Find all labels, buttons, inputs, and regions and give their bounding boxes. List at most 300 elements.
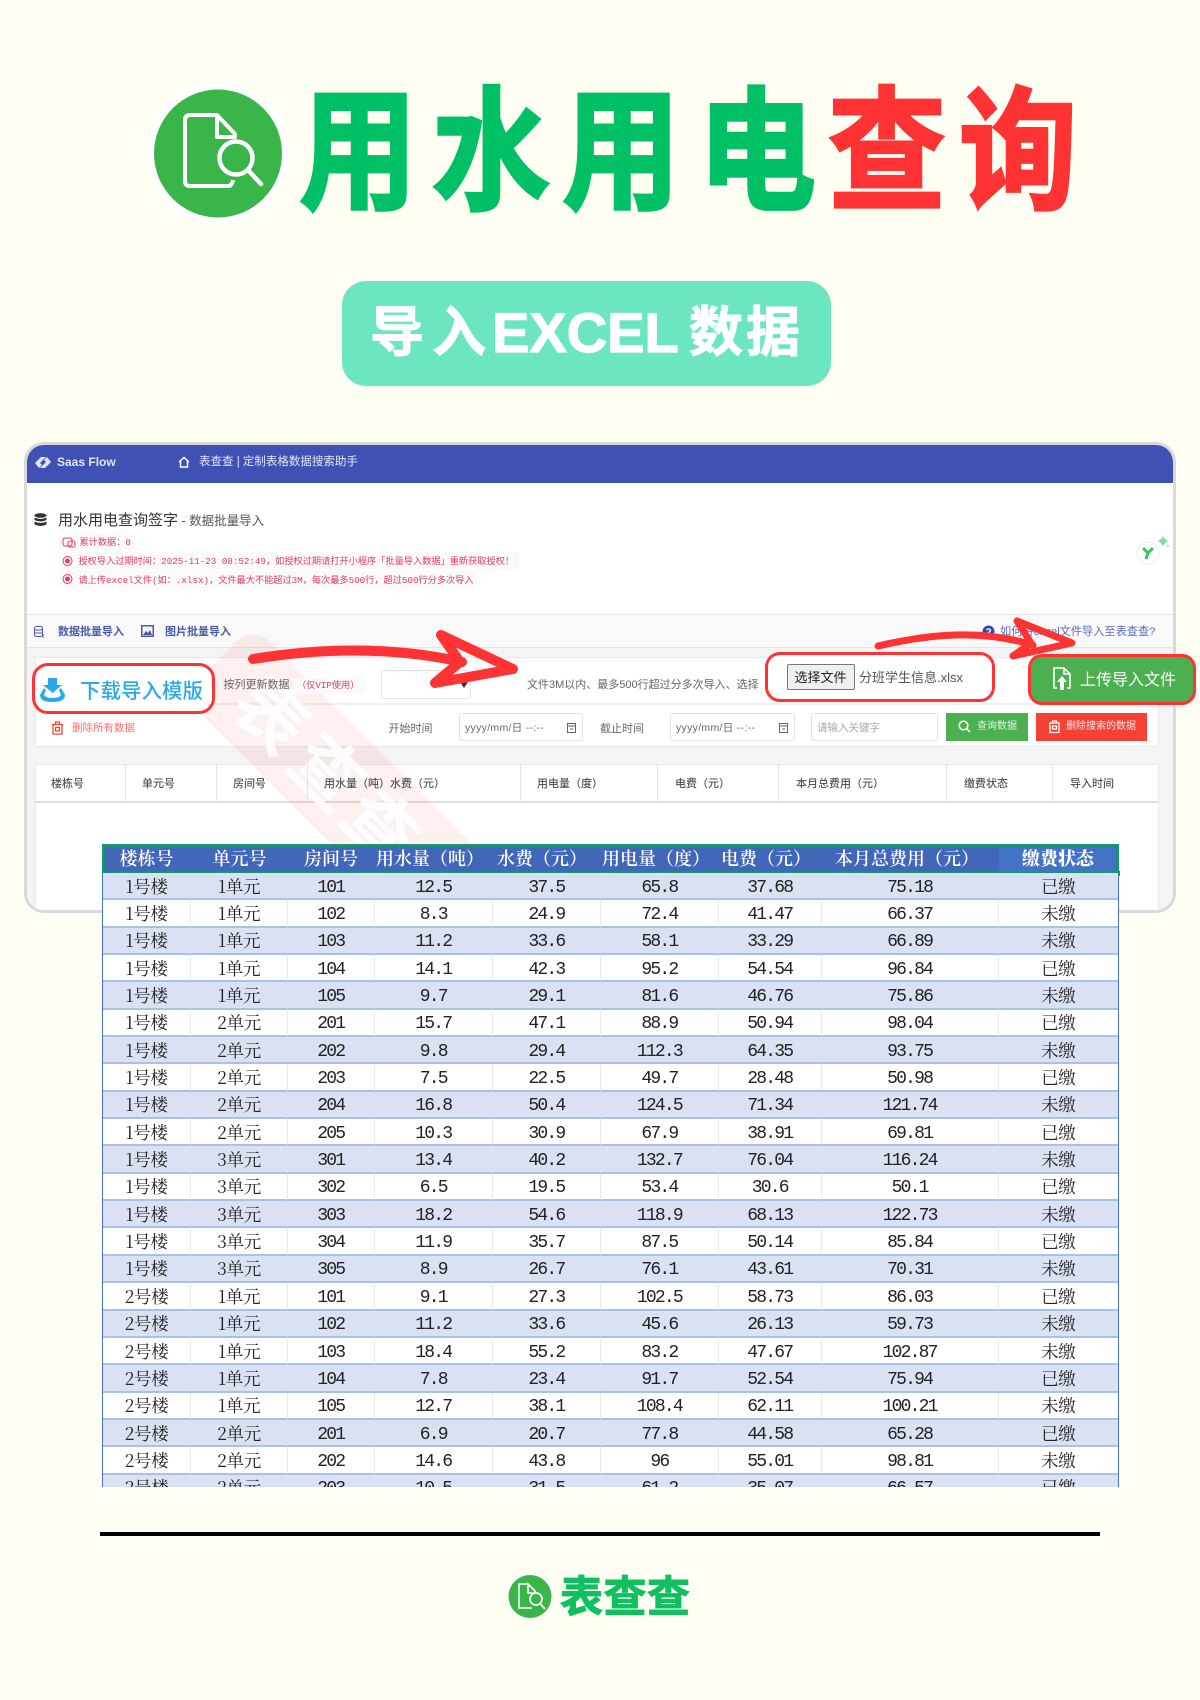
spreadsheet header row: 本月总费用（元） [835, 849, 979, 869]
spreadsheet data table: 49.7 [641, 1069, 677, 1089]
spreadsheet data table: 103 [317, 1343, 344, 1363]
spreadsheet data table: 已缴 [1041, 1229, 1075, 1254]
button: delete search results: 删除搜索的数据 [1066, 721, 1136, 732]
spreadsheet data table: 77.8 [641, 1425, 677, 1445]
spreadsheet data table: 47.1 [528, 1014, 564, 1034]
spreadsheet data table: 1号楼 [125, 1010, 168, 1035]
spreadsheet data table: 1单元 [218, 928, 260, 953]
spreadsheet data table: 103 [317, 932, 344, 952]
table header labels: 用电量（度） [537, 778, 603, 790]
title: 电 [698, 79, 816, 228]
toolbar card [34, 657, 1159, 747]
spreadsheet data table: 93.75 [887, 1042, 932, 1062]
spreadsheet data table: 1单元 [218, 1284, 260, 1309]
spreadsheet header row: 水费（元） [497, 849, 587, 869]
icon: image import [141, 625, 154, 637]
spreadsheet data table: 1单元 [218, 874, 260, 899]
spreadsheet data table: 202 [317, 1042, 344, 1062]
spreadsheet data table: 6.9 [420, 1425, 447, 1445]
spreadsheet data table: 1号楼 [125, 1229, 168, 1254]
spreadsheet data table: 64.35 [747, 1042, 792, 1062]
notice: upload rules [58, 571, 476, 588]
spreadsheet data table: 50.98 [887, 1069, 932, 1089]
spreadsheet data table: 26.7 [528, 1260, 564, 1280]
spreadsheet data table: 91.7 [641, 1370, 677, 1390]
spreadsheet data table: 1号楼 [125, 928, 168, 953]
spreadsheet data table: 23.4 [528, 1370, 564, 1390]
spreadsheet data table: 70.31 [887, 1260, 932, 1280]
spreadsheet data table: 24.9 [528, 905, 564, 925]
spreadsheet data table: 未缴 [1041, 1448, 1075, 1473]
spreadsheet data table: 35.7 [528, 1233, 564, 1253]
spreadsheet data table: 16.8 [415, 1096, 451, 1116]
notice: authorization expiry: 授权导入过期时间：2025-11-23 08:52:49，如授权过期请打开小程序「批量导入数据」重新获取授权！ [78, 556, 514, 567]
icon: delete all [52, 721, 63, 735]
spreadsheet data table: 2单元 [217, 1120, 261, 1145]
icon: data import [34, 626, 44, 638]
red highlight: download template [32, 663, 215, 714]
spreadsheet data table: 3单元 [217, 1147, 261, 1172]
spreadsheet data table: 已缴 [1041, 1010, 1075, 1035]
spreadsheet data table: 37.68 [747, 878, 792, 898]
spreadsheet data table: 已缴 [1041, 956, 1075, 981]
help link: 如何将excel文件导入至表查查? [1000, 626, 1155, 638]
spreadsheet data table: 58.1 [641, 932, 677, 952]
spreadsheet data table: 67.9 [641, 1124, 677, 1144]
spreadsheet data table: 112.3 [637, 1042, 682, 1062]
spreadsheet data table [102, 873, 1119, 1487]
spreadsheet data table: 2号楼 [125, 1311, 168, 1336]
spreadsheet data table: 1号楼 [125, 901, 168, 926]
spreadsheet data table: 未缴 [1041, 1202, 1075, 1227]
spreadsheet data table: 102.5 [637, 1288, 682, 1308]
spreadsheet data table: 11.2 [415, 932, 451, 952]
spreadsheet data table: 65.8 [641, 878, 677, 898]
spreadsheet data table: 46.76 [747, 987, 792, 1007]
input: keyword [811, 713, 938, 741]
table header labels: 缴费状态 [964, 778, 1008, 790]
spreadsheet data table: 43.61 [747, 1260, 792, 1280]
spreadsheet data table: 101 [317, 878, 344, 898]
spreadsheet data table: 101 [317, 1288, 344, 1308]
spreadsheet data table: 1号楼 [125, 1202, 168, 1227]
spreadsheet data table: 37.5 [528, 878, 564, 898]
spreadsheet data table: 50.4 [528, 1096, 564, 1116]
spreadsheet data table: 95.2 [641, 960, 677, 980]
spreadsheet header row: 用水量（吨） [376, 849, 484, 869]
table header labels: 导入时间 [1070, 778, 1114, 790]
spreadsheet data table: 1号楼 [125, 1256, 168, 1281]
spreadsheet data table: 26.13 [747, 1315, 792, 1335]
table header labels: 本月总费用（元） [796, 778, 884, 790]
spreadsheet data table: 未缴 [1041, 1311, 1075, 1336]
spreadsheet data table: 83.2 [641, 1343, 677, 1363]
spreadsheet header row: 房间号 [304, 849, 358, 869]
spreadsheet data table: 38.1 [528, 1397, 564, 1417]
spreadsheet data table: 2单元 [217, 1010, 261, 1035]
spreadsheet data table: 19.5 [528, 1178, 564, 1198]
spreadsheet data table: 8.3 [420, 905, 447, 925]
watermark stripe: 查 [322, 759, 447, 884]
panel: app screenshot [24, 442, 1176, 913]
spreadsheet header row [102, 844, 1119, 874]
spreadsheet data table: 69.81 [887, 1124, 932, 1144]
brand name: Saas Flow [57, 455, 116, 469]
input: start date [459, 713, 583, 741]
spreadsheet data table: 未缴 [1041, 1256, 1075, 1281]
spreadsheet data table: 54.6 [528, 1206, 564, 1226]
spreadsheet data table: 104 [317, 1370, 344, 1390]
spreadsheet data table: 1号楼 [125, 1147, 168, 1172]
spreadsheet data table: 43.8 [528, 1452, 564, 1472]
spreadsheet data table: 22.5 [528, 1069, 564, 1089]
spreadsheet data table: 124.5 [637, 1096, 682, 1116]
spreadsheet data table: 1单元 [218, 1339, 260, 1364]
subtitle pill: 导入EXCEL数据: 据 [746, 303, 800, 363]
title: 询 [959, 79, 1077, 228]
spreadsheet data table: 18.2 [415, 1206, 451, 1226]
spreadsheet data table: 72.4 [641, 905, 677, 925]
icon: database [34, 513, 46, 526]
spreadsheet data table: 7.8 [420, 1370, 447, 1390]
table header labels: 单元号 [142, 778, 175, 790]
spreadsheet data table: 未缴 [1041, 1092, 1075, 1117]
spreadsheet data table: 29.4 [528, 1042, 564, 1062]
input: end date: yyyy/mm/日 --:-- [676, 722, 755, 734]
subtitle pill: 导入EXCEL数据 [342, 281, 831, 386]
spreadsheet data table: 29.1 [528, 987, 564, 1007]
spreadsheet data table: 42.3 [528, 960, 564, 980]
subtitle pill: 导入EXCEL数据: 数 [689, 303, 743, 363]
brand wordmark: 表查查 [560, 1574, 690, 1622]
spreadsheet data table: 53.4 [641, 1178, 677, 1198]
spreadsheet data table: 40.2 [528, 1151, 564, 1171]
spreadsheet data table: 121.74 [883, 1096, 937, 1116]
spreadsheet data table: 27.3 [528, 1288, 564, 1308]
spreadsheet data table: 11.9 [415, 1233, 451, 1253]
button: search: 查询数据 [977, 721, 1017, 732]
spreadsheet data table: 1单元 [218, 983, 260, 1008]
spreadsheet data table: 76.04 [747, 1151, 792, 1171]
spreadsheet data table: 未缴 [1041, 928, 1075, 953]
title: 用 [562, 79, 680, 228]
spreadsheet data table: 12.7 [415, 1397, 451, 1417]
spreadsheet data table: 1号楼 [125, 1174, 168, 1199]
spreadsheet data table: 20.7 [528, 1425, 564, 1445]
data table card [34, 764, 1159, 919]
spreadsheet data table: 33.29 [747, 932, 792, 952]
page heading: 用水用电查询签字 - 数据批量导入 [58, 512, 264, 529]
file size note: 文件3M以内、最多500行超过分多次导入、选择 [527, 679, 759, 691]
spreadsheet data table: 2单元 [217, 1092, 261, 1117]
spreadsheet data table: 未缴 [1041, 901, 1075, 926]
spreadsheet data table: 305 [317, 1260, 344, 1280]
help icon [982, 626, 994, 634]
spreadsheet data table: 28.48 [747, 1069, 792, 1089]
spreadsheet data table: 122.73 [883, 1206, 937, 1226]
spreadsheet data table: 已缴 [1041, 1284, 1075, 1309]
button text: 下载导入模版 [80, 680, 203, 703]
spreadsheet data table: 204 [317, 1096, 344, 1116]
title: 查 [828, 79, 946, 228]
spreadsheet data table: 108.4 [637, 1397, 682, 1417]
spreadsheet data table: 11.2 [415, 1315, 451, 1335]
spreadsheet data table: 2单元 [217, 1038, 261, 1063]
spreadsheet data table: 44.58 [747, 1425, 792, 1445]
spreadsheet data table: 14.1 [415, 960, 451, 980]
app header bar [27, 445, 1173, 483]
spreadsheet header row: 缴费状态 [1022, 849, 1094, 869]
spreadsheet data table: 71.34 [747, 1096, 792, 1116]
title [299, 79, 1077, 228]
spreadsheet data table: 33.6 [528, 932, 564, 952]
spreadsheet data table: 10.3 [415, 1124, 451, 1144]
notice: total data [58, 534, 135, 550]
spreadsheet data table: 12.5 [415, 878, 451, 898]
spreadsheet data table: 1号楼 [125, 1092, 168, 1117]
spreadsheet header row: 电费（元） [721, 849, 811, 869]
spreadsheet data table: 47.67 [747, 1343, 792, 1363]
spreadsheet data table: 30.6 [752, 1178, 788, 1198]
spreadsheet data table: 96 [650, 1452, 668, 1472]
input: start date: yyyy/mm/日 --:-- [465, 722, 544, 734]
tab: data import: 数据批量导入 [58, 626, 124, 638]
spreadsheet data table: 已缴 [1041, 1120, 1075, 1145]
spreadsheet data table: 未缴 [1041, 983, 1075, 1008]
spreadsheet data table: 2号楼 [125, 1421, 168, 1446]
spreadsheet data table: 66.89 [887, 932, 932, 952]
spreadsheet data table: 未缴 [1041, 1339, 1075, 1364]
data table header rule [35, 801, 1158, 803]
spreadsheet data table: 52.54 [747, 1370, 792, 1390]
label: update by column: 按列更新数据 [224, 679, 290, 691]
link: delete all data: 删除所有数据 [72, 722, 135, 734]
toolbar divider band [35, 703, 1158, 705]
spreadsheet data table: 102 [317, 1315, 344, 1335]
spreadsheet data table: 68.13 [747, 1206, 792, 1226]
input: end date [670, 713, 795, 741]
spreadsheet data table: 33.6 [528, 1315, 564, 1335]
button: upload file [1028, 654, 1196, 705]
spreadsheet data table: 202 [317, 1452, 344, 1472]
spreadsheet data table: 303 [317, 1206, 344, 1226]
tab bar [27, 614, 1173, 648]
spreadsheet data table: 已缴 [1041, 1065, 1075, 1090]
spreadsheet data table: 301 [317, 1151, 344, 1171]
spreadsheet data table: 未缴 [1041, 1038, 1075, 1063]
spreadsheet data table: 9.7 [420, 987, 447, 1007]
spreadsheet data table: 15.7 [415, 1014, 451, 1034]
spreadsheet data table: 41.47 [747, 905, 792, 925]
spreadsheet data table: 1号楼 [125, 1120, 168, 1145]
spreadsheet data table: 50.14 [747, 1233, 792, 1253]
spreadsheet data table: 1单元 [218, 1311, 260, 1336]
spreadsheet data table: 55.01 [747, 1452, 792, 1472]
table header labels: 电费（元） [675, 778, 730, 790]
spreadsheet data table: 已缴 [1041, 1174, 1075, 1199]
spreadsheet header row: 楼栋号 [120, 849, 174, 869]
spreadsheet data table: 未缴 [1041, 1147, 1075, 1172]
footer logo [507, 1574, 690, 1622]
tab: image import: 图片批量导入 [165, 626, 231, 638]
spreadsheet data table: 75.86 [887, 987, 932, 1007]
VIP note: （仅VIP使用） [297, 680, 359, 691]
button: delete search results [1036, 713, 1146, 741]
spreadsheet data table: 201 [317, 1425, 344, 1445]
spreadsheet data table: 9.1 [420, 1288, 447, 1308]
spreadsheet data table: 98.81 [887, 1452, 932, 1472]
spreadsheet data table: 58.73 [747, 1288, 792, 1308]
spreadsheet data table: 1单元 [218, 956, 260, 981]
label: start time: 开始时间 [388, 723, 432, 735]
spreadsheet data table: 2号楼 [125, 1339, 168, 1364]
spreadsheet data table: 205 [317, 1124, 344, 1144]
spreadsheet data table: 54.54 [747, 960, 792, 980]
spreadsheet data table: 302 [317, 1178, 344, 1198]
spreadsheet data table: 已缴 [1041, 874, 1075, 899]
spreadsheet data table: 已缴 [1041, 1421, 1075, 1446]
subtitle pill: 导入EXCEL数据: 入 [432, 303, 486, 363]
subtitle pill: 导入EXCEL数据: EXCEL [492, 301, 679, 364]
spreadsheet data table: 2号楼 [125, 1393, 168, 1418]
spreadsheet data table: 2号楼 [125, 1284, 168, 1309]
spreadsheet data table: 85.84 [887, 1233, 932, 1253]
input: keyword: 请输入关键字 [817, 722, 880, 734]
spreadsheet header row: 单元号 [212, 849, 266, 869]
button: search [946, 713, 1028, 741]
spreadsheet data table: 38.91 [747, 1124, 792, 1144]
spreadsheet data table: 118.9 [637, 1206, 682, 1226]
spreadsheet data table: 104 [317, 960, 344, 980]
spreadsheet data table: 2号楼 [125, 1448, 168, 1473]
spreadsheet data table: 50.1 [892, 1178, 928, 1198]
content background [27, 648, 1173, 916]
spreadsheet data table: 3单元 [217, 1256, 261, 1281]
spreadsheet data table: 105 [317, 1397, 344, 1417]
spreadsheet data table: 18.4 [415, 1343, 451, 1363]
icon: download [40, 678, 65, 702]
VIP note [293, 678, 365, 694]
icon: upload [1053, 667, 1071, 690]
spreadsheet data table: 76.1 [641, 1260, 677, 1280]
table header labels: 楼栋号 [51, 778, 84, 790]
spreadsheet data table: 2单元 [217, 1448, 261, 1473]
spreadsheet data table: 102 [317, 905, 344, 925]
spreadsheet data table: 未缴 [1041, 1393, 1075, 1418]
notice: upload rules: 请上传excel文件(如：.xlsx)，文件最大不能超过3M，每次最多500行，超过500行分多次导入 [78, 575, 474, 586]
spreadsheet data table: 203 [317, 1069, 344, 1089]
spreadsheet data table: 102.87 [883, 1343, 937, 1363]
watermark stripe: 查 [269, 706, 394, 831]
notice: total data: 累计数据：0 [80, 537, 131, 548]
spreadsheet data table: 81.6 [641, 987, 677, 1007]
spreadsheet data table: 98.04 [887, 1014, 932, 1034]
spreadsheet data table: 1单元 [218, 1366, 260, 1391]
spreadsheet header row: 用电量（度） [602, 849, 710, 869]
spreadsheet data table: 2单元 [217, 1421, 261, 1446]
spreadsheet data table: 2号楼 [125, 1366, 168, 1391]
button text: 上传导入文件 [1080, 672, 1176, 689]
spreadsheet data table: 1单元 [218, 1393, 260, 1418]
column dividers [125, 764, 1053, 802]
spreadsheet data table: 3单元 [217, 1202, 261, 1227]
spreadsheet data table: 86.03 [887, 1288, 932, 1308]
spreadsheet data table: 1号楼 [125, 956, 168, 981]
spreadsheet data table: 132.7 [637, 1151, 682, 1171]
spreadsheet data table: 105 [317, 987, 344, 1007]
spreadsheet data table: 3单元 [217, 1229, 261, 1254]
choose file button [786, 664, 854, 690]
spreadsheet data table: 1单元 [218, 901, 260, 926]
icon: home [178, 456, 190, 468]
icon: small logo [507, 1574, 553, 1620]
app tagline: 表查查 | 定制表格数据搜索助手 [199, 456, 358, 468]
spreadsheet data table: 116.24 [883, 1151, 937, 1171]
spreadsheet data table: 304 [317, 1233, 344, 1253]
icon: document search logo [147, 82, 289, 224]
spreadsheet data table: 9.8 [420, 1042, 447, 1062]
spreadsheet data table: 2单元 [217, 1065, 261, 1090]
table header labels: 房间号 [233, 778, 266, 790]
spreadsheet data table: 66.37 [887, 905, 932, 925]
arrow: to file note [248, 630, 518, 688]
spreadsheet data table: 100.21 [883, 1397, 937, 1417]
footer rule [100, 1532, 1100, 1536]
spreadsheet data table: 88.9 [641, 1014, 677, 1034]
arrow: to upload button [874, 618, 1076, 660]
icons: notice bullets [62, 538, 76, 584]
file name: 分班学生信息.xlsx [859, 670, 963, 685]
spreadsheet data table: 13.4 [415, 1151, 451, 1171]
spreadsheet data table: 30.9 [528, 1124, 564, 1144]
choose file button: 选择文件 [794, 670, 846, 684]
spreadsheet data table: 59.73 [887, 1315, 932, 1335]
icon: assistant bot [1136, 535, 1170, 564]
spreadsheet data table: 8.9 [420, 1260, 447, 1280]
spreadsheet data table: 75.18 [887, 878, 932, 898]
spreadsheet data table: 50.94 [747, 1014, 792, 1034]
spreadsheet data table: 已缴 [1041, 1366, 1075, 1391]
spreadsheet data table: 65.28 [887, 1425, 932, 1445]
spreadsheet data table: 1号楼 [125, 1038, 168, 1063]
title: 水 [432, 79, 550, 228]
spreadsheet selection handle [1115, 871, 1120, 876]
spreadsheet data table: 75.94 [887, 1370, 932, 1390]
spreadsheet data table: 87.5 [641, 1233, 677, 1253]
spreadsheet data table: 62.11 [747, 1397, 792, 1417]
subtitle pill: 导入EXCEL数据: 导 [370, 303, 424, 363]
table header labels [51, 778, 1114, 790]
spreadsheet data table: 3单元 [217, 1174, 261, 1199]
title: 用 [299, 79, 417, 228]
spreadsheet data table: 1号楼 [125, 874, 168, 899]
spreadsheet data table: 1号楼 [125, 1065, 168, 1090]
notice: authorization expiry [58, 552, 519, 570]
red highlight: file picker [765, 652, 995, 702]
spreadsheet data table: 7.5 [420, 1069, 447, 1089]
spreadsheet data table: 14.6 [415, 1452, 451, 1472]
spreadsheet data table: 96.84 [887, 960, 932, 980]
spreadsheet data table: 6.5 [420, 1178, 447, 1198]
watermark stripe [202, 634, 472, 884]
spreadsheet data table: 45.6 [641, 1315, 677, 1335]
table header labels: 用水量（吨）水费（元） [324, 778, 445, 790]
select box [381, 670, 471, 699]
spreadsheet data table: 201 [317, 1014, 344, 1034]
icon: saas flow logo [35, 457, 51, 468]
spreadsheet data table: 1号楼 [125, 983, 168, 1008]
label: end time: 截止时间 [600, 723, 644, 735]
